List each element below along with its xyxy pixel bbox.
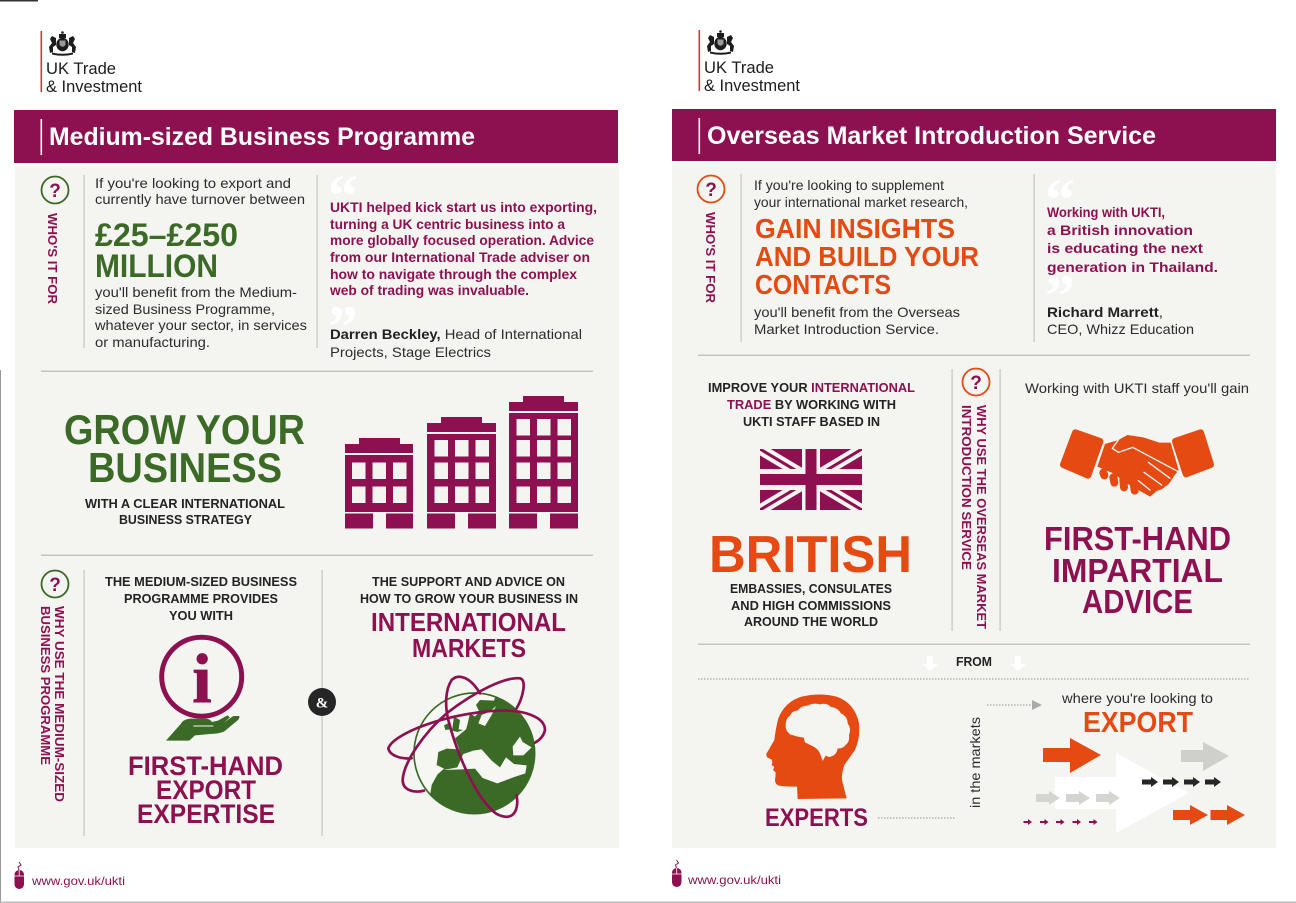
footer: website — [672, 860, 781, 887]
section: grow your business: WITH A CLEAR INTERNATIONAL — [85, 497, 285, 511]
quote: Darren Beckley: UKTI helped kick start us into exporting, — [330, 199, 597, 215]
text: programme provides: YOU WITH — [169, 609, 233, 623]
arrow: dotted to export — [987, 700, 1042, 710]
text: first-hand export expertise: FIRST-HAND — [128, 751, 283, 781]
section: grow your business: BUSINESS — [88, 444, 282, 491]
text: turnover: you'll benefit from the Medium- — [95, 284, 297, 300]
text: gain insights: your international market research, — [754, 194, 968, 210]
text: turnover — [94, 175, 307, 350]
icon: information in hand: i — [192, 641, 212, 718]
section: grow your business — [64, 406, 305, 527]
quote: Darren Beckley — [328, 163, 597, 360]
text: turnover: whatever your sector, in services — [94, 317, 307, 333]
text: international markets: MARKETS — [412, 633, 526, 663]
section: impartial advice: Working with UKTI staff you'll gain — [1025, 380, 1249, 396]
heading banner: Medium-sized Business Programme — [49, 123, 475, 151]
text: gain insights: Market Introduction Service. — [754, 321, 939, 337]
text: gain insights: AND BUILD YOUR — [755, 241, 979, 272]
quote: Darren Beckley: turning a UK centric business into a — [330, 216, 565, 232]
quote: Darren Beckley: how to navigate through the complex — [330, 266, 577, 282]
text: first-hand export expertise — [128, 751, 283, 829]
quote: Richard Marrett: Working with UKTI, — [1047, 204, 1165, 220]
footer: website: www.gov.uk/ukti — [687, 873, 781, 887]
icon: question mark — [42, 570, 68, 598]
quote: Richard Marrett: “ — [1045, 167, 1075, 233]
section: who's it for — [42, 163, 597, 360]
icon: question mark: ? — [970, 373, 982, 394]
text: embassies: AROUND THE WORLD — [744, 615, 878, 629]
panel background — [15, 166, 619, 848]
icon: ampersand badge — [308, 688, 336, 716]
text: embassies: AND HIGH COMMISSIONS — [731, 599, 891, 613]
label: from with arrows — [922, 655, 1026, 671]
quote: Richard Marrett: generation in Thailand. — [1047, 259, 1218, 275]
icon: ampersand badge: & — [316, 696, 328, 712]
section label: why use the service — [959, 368, 990, 629]
quote: Darren Beckley: ” — [328, 294, 358, 360]
section: British staff — [708, 381, 915, 629]
icon: question mark: ? — [49, 575, 61, 596]
icon: royal crest — [707, 30, 734, 55]
text: improve your international trade: UKTI STAFF BASED IN — [743, 415, 880, 429]
icon: royal crest — [49, 31, 76, 56]
text: embassies — [730, 582, 892, 629]
quote: Darren Beckley: Darren Beckley, Head of International — [330, 326, 582, 342]
text: turnover: sized Business Programme, — [95, 301, 275, 317]
icon: question mark: ? — [705, 180, 717, 201]
section: who's it for — [698, 167, 1218, 342]
footer: website — [14, 862, 125, 889]
text: gain insights: CONTACTS — [755, 269, 891, 300]
text: international markets — [360, 575, 578, 663]
logo: UK Trade & Investment: & Investment — [46, 77, 142, 96]
quote: Richard Marrett: CEO, Whizz Education — [1047, 321, 1194, 337]
text: improve your international trade — [708, 381, 915, 429]
text: gain insights: If you're looking to supplement — [754, 177, 944, 193]
text: where you're looking to export — [1061, 690, 1213, 739]
text: first-hand export expertise: EXPERTISE — [137, 799, 275, 829]
text: turnover: MILLION — [95, 248, 218, 284]
icon: globe with orbits — [388, 677, 545, 817]
text: programme provides: THE MEDIUM-SIZED BUSINESS — [105, 575, 297, 589]
text: programme provides: PROGRAMME PROVIDES — [124, 592, 278, 606]
text: first-hand impartial advice: IMPARTIAL — [1052, 552, 1223, 589]
text: gain insights: GAIN INSIGHTS — [755, 213, 955, 244]
text: turnover: £25–£250 — [95, 217, 238, 253]
icon: computer mouse — [672, 860, 682, 887]
icon: question mark — [962, 368, 990, 396]
text: first-hand export expertise: EXPORT — [156, 775, 256, 805]
text: where you're looking to export: EXPORT — [1083, 707, 1193, 739]
icon: question mark — [42, 176, 68, 204]
heading banner — [672, 109, 1276, 161]
icon: head with brain — [766, 694, 859, 799]
icon: three buildings — [345, 396, 578, 528]
quote: Richard Marrett — [1045, 167, 1218, 337]
section: British staff: BRITISH — [709, 526, 912, 584]
text: international markets: THE SUPPORT AND ADVICE ON — [372, 575, 565, 589]
text: turnover: If you're looking to export and — [95, 175, 291, 191]
logo: UK Trade & Investment: UK Trade — [46, 59, 116, 78]
icon: handshake — [1063, 433, 1211, 497]
section: who's it for: WHO'S IT FOR — [703, 212, 718, 304]
text: international markets: HOW TO GROW YOUR BUSINESS IN — [360, 592, 578, 606]
label: from with arrows: FROM — [956, 655, 992, 669]
text: first-hand impartial advice: FIRST-HAND — [1044, 520, 1231, 557]
heading banner — [14, 110, 618, 163]
logo: UK Trade & Investment: & Investment — [704, 76, 800, 95]
icon: information in hand — [162, 637, 242, 741]
text: programme provides — [105, 575, 297, 623]
chart: export arrows — [1024, 738, 1245, 833]
quote: Richard Marrett: Richard Marrett , — [1047, 304, 1163, 320]
text: improve your international trade: TRADE BY WORKING WITH — [727, 398, 896, 412]
panel: Overseas Market Introduction Service — [672, 30, 1276, 887]
quote: Richard Marrett: ” — [1045, 263, 1075, 329]
quote: Darren Beckley: from our International Trade adviser on — [330, 249, 590, 265]
icon: computer mouse — [14, 862, 24, 889]
section: impartial advice — [1025, 380, 1249, 620]
text: embassies: EMBASSIES, CONSULATES — [730, 582, 892, 596]
section: why use the programme — [38, 570, 578, 836]
text: gain insights — [754, 177, 979, 337]
footer: website: www.gov.uk/ukti — [31, 874, 125, 888]
text: international markets: INTERNATIONAL — [371, 607, 566, 637]
quote: Darren Beckley: “ — [328, 163, 358, 229]
section: grow your business: BUSINESS STRATEGY — [119, 513, 253, 527]
panel: Overseas Market Introduction Service: in the markets — [967, 717, 983, 808]
logo: UK Trade & Investment — [40, 31, 142, 96]
quote: Richard Marrett: a British innovation — [1047, 222, 1193, 238]
quote: Richard Marrett: is educating the next — [1047, 240, 1203, 256]
section: why use the programme: WHY USE THE MEDIUM-SIZED — [52, 606, 67, 802]
text: turnover: or manufacturing. — [95, 334, 210, 350]
icon: union flag — [760, 449, 862, 510]
text: improve your international trade: IMPROVE YOUR INTERNATIONAL — [708, 381, 915, 395]
text: where you're looking to export: where you're looking to — [1061, 690, 1213, 706]
quote: Darren Beckley: web of trading was invaluable. — [329, 282, 529, 298]
text: gain insights: you'll benefit from the Overseas — [754, 304, 960, 320]
panel background — [672, 163, 1276, 848]
section: why use the programme: BUSINESS PROGRAMME — [38, 606, 53, 765]
section label: why use the service: WHY USE THE OVERSEAS MARKET — [974, 405, 989, 629]
icon: question mark: ? — [49, 181, 61, 202]
section: grow your business: GROW YOUR — [64, 406, 305, 453]
text: turnover: currently have turnover between — [95, 191, 305, 207]
section label: why use the service: INTRODUCTION SERVICE — [959, 405, 974, 570]
logo: UK Trade & Investment — [698, 30, 800, 95]
quote: Darren Beckley: Projects, Stage Electrics — [330, 344, 491, 360]
section: who's it for: WHO'S IT FOR — [45, 213, 60, 305]
heading banner: Overseas Market Introduction Service — [707, 122, 1156, 150]
text: first-hand impartial advice: ADVICE — [1082, 583, 1193, 620]
label: experts: EXPERTS — [765, 804, 868, 832]
quote: Darren Beckley: more globally focused operation. Advice — [330, 232, 594, 248]
icon: question mark — [698, 176, 724, 202]
text: first-hand impartial advice — [1044, 520, 1231, 620]
logo: UK Trade & Investment: UK Trade — [704, 58, 774, 77]
